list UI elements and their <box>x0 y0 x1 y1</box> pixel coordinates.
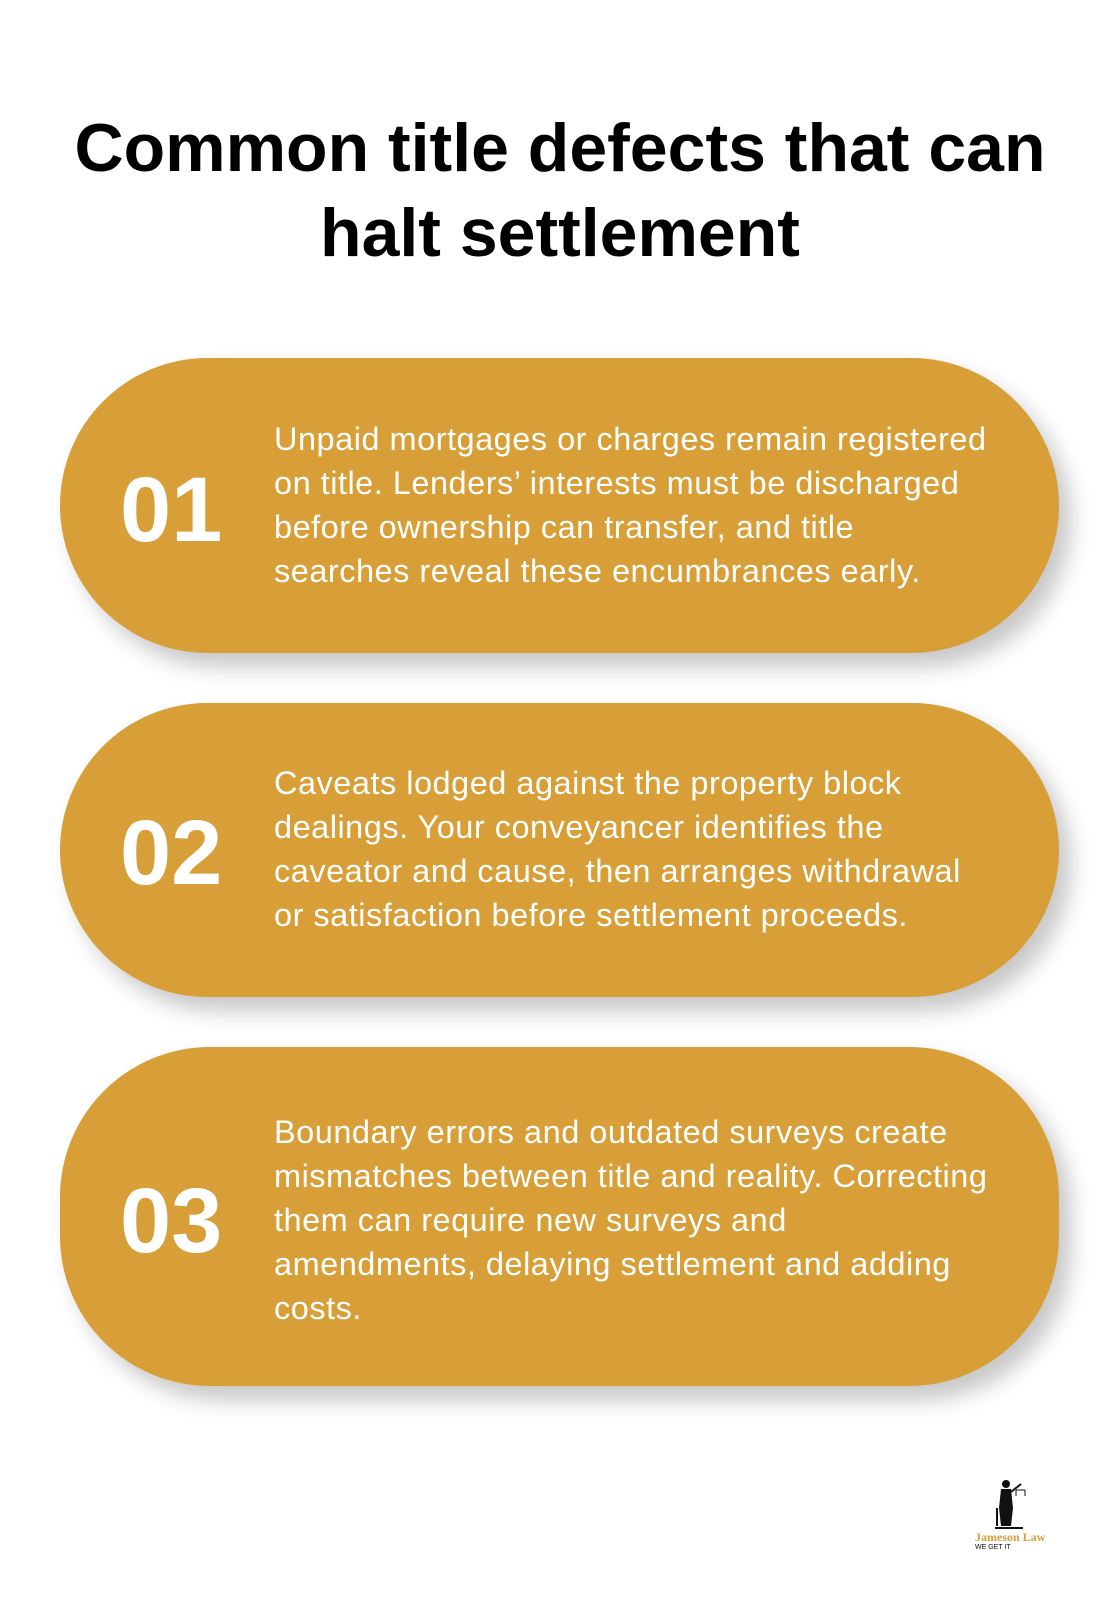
text 03: costs. <box>274 1290 362 1326</box>
number 02: 02 <box>120 802 222 904</box>
text 02 <box>274 765 961 933</box>
text 03: them can require new surveys and <box>274 1202 787 1238</box>
title <box>74 110 1046 271</box>
panel: 02 <box>60 703 1059 997</box>
text 03: mismatches between title and reality. Correcting <box>274 1158 987 1194</box>
text 01 <box>274 421 987 589</box>
title: halt settlement <box>320 195 800 271</box>
panel: 03 <box>60 1047 1059 1386</box>
text 03: Boundary errors and outdated surveys create <box>274 1114 948 1150</box>
panel: 01 <box>60 358 1059 653</box>
text 02: or satisfaction before settlement proceeds. <box>274 897 908 933</box>
number 01: 01 <box>120 459 222 561</box>
logo <box>975 1480 1046 1551</box>
text 03 <box>274 1114 987 1326</box>
text 01: searches reveal these encumbrances early. <box>274 553 921 589</box>
logo text: Jameson Law <box>975 1530 1045 1544</box>
number 03: 03 <box>120 1170 222 1272</box>
icon: lady justice <box>995 1480 1026 1529</box>
text 02: caveator and cause, then arranges withdrawal <box>274 853 961 889</box>
text 03: amendments, delaying settlement and adding <box>274 1246 951 1282</box>
text 01: Unpaid mortgages or charges remain registered <box>274 421 987 457</box>
title: Common title defects that can <box>74 110 1046 186</box>
text 02: dealings. Your conveyancer identifies the <box>274 809 884 845</box>
text 01: before ownership can transfer, and title <box>274 509 854 545</box>
logo: WE GET IT <box>975 1544 1011 1551</box>
text 02: Caveats lodged against the property block <box>274 765 902 801</box>
text 01: on title. Lenders’ interests must be discharged <box>274 465 959 501</box>
